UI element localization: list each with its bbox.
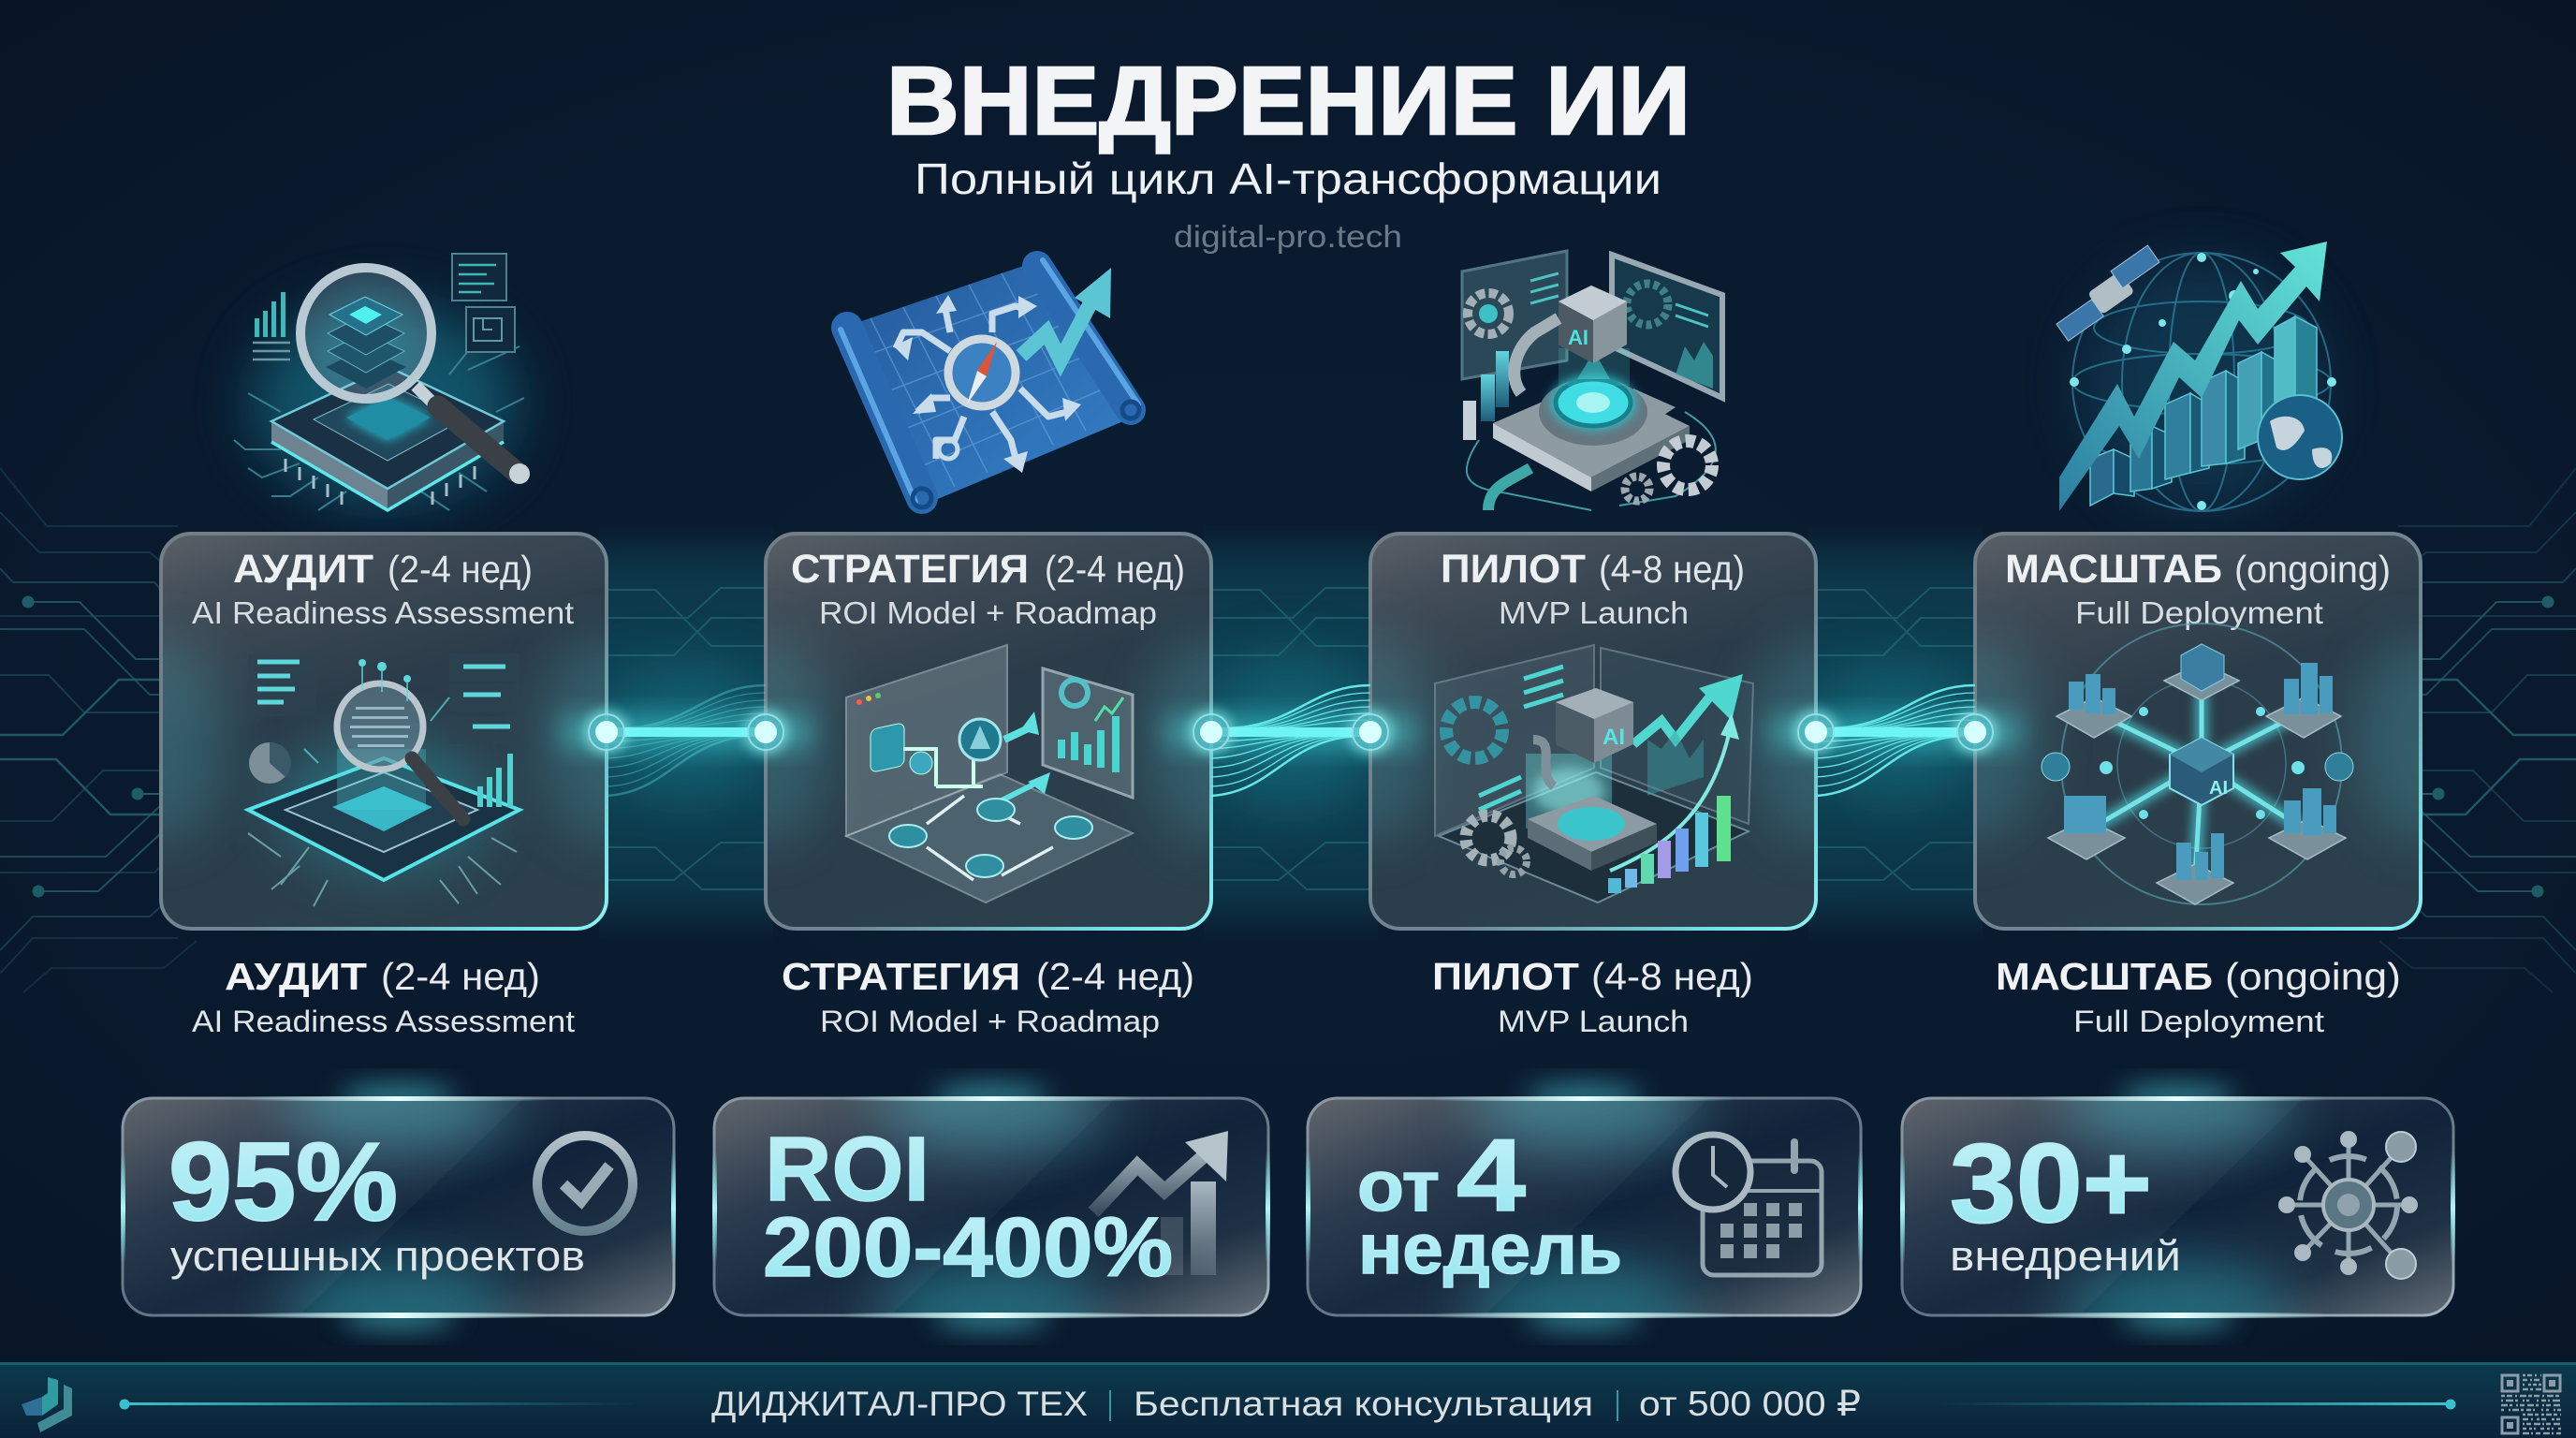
icon: audit magnifier over chip [234,254,530,510]
icon: check ring [537,1136,633,1231]
label: pilot: MVP Launch [1498,1005,1689,1038]
caption: успешных проектов [170,1232,585,1280]
value: 200-400% [763,1201,1173,1295]
heading: (ongoing) [2234,548,2391,591]
subheading: ROI Model + Roadmap [819,595,1157,630]
label: audit: (2-4 нед) [381,955,540,998]
footer right line [1939,1399,2456,1410]
heading: СТРАТЕГИЯ [791,547,1029,592]
connector: audit to strategy [562,685,811,796]
stat card: 30+ [1900,1058,2455,1357]
illustration: isometric roadmap [846,645,1133,902]
label: scale [1996,955,2401,1038]
card glow [1910,637,2486,843]
label: strategy: (2-4 нед) [1036,955,1194,998]
caption: внедрений [1950,1232,2181,1280]
illustration: hub network: AI [2209,778,2228,799]
label: pilot: ПИЛОТ [1432,955,1579,998]
value [763,1118,1173,1295]
circuit traces gap 3 [1816,588,1975,889]
circuit traces left [0,468,197,992]
heading: (2-4 нед) [388,548,533,591]
subheading: Full Deployment [2075,595,2323,630]
heading: АУДИТ [233,547,373,592]
card glow [700,637,1277,843]
label: audit: АУДИТ [225,955,367,998]
footer left line [120,1399,639,1410]
icon: logo [22,1377,72,1432]
gap glows [599,524,1983,941]
label: scale: (ongoing) [2225,955,2401,998]
label: pilot [1432,955,1753,1038]
label: scale: МАСШТАБ [1996,955,2213,998]
heading: ПИЛОТ [1441,547,1586,592]
lens [302,270,430,397]
label: strategy: ROI Model + Roadmap [820,1005,1160,1038]
footer text: ДИДЖИТАЛ-ПРО ТЕХ [711,1385,1088,1423]
subtitle: Полный цикл AI-трансформации [915,154,1661,203]
stat card: 95% [121,1058,676,1357]
circuit traces gap 1 [607,588,766,889]
label: audit [192,955,575,1038]
mini charts [255,292,285,337]
subheading: MVP Launch [1499,595,1689,630]
icon: rising chart [1093,1131,1228,1275]
label: pilot: (4-8 нед) [1591,955,1753,998]
heading [1441,547,1745,592]
value [1357,1118,1622,1289]
heading: (2-4 нед) [1045,548,1185,591]
icon: strategy blueprint map [841,260,1139,507]
website: digital-pro.tech [1174,219,1402,254]
panel: strategy card [764,532,1213,931]
footer text: Бесплатная консультация [1134,1385,1593,1423]
illustration: hub network [2042,624,2353,904]
label: audit: AI Readiness Assessment [192,1005,575,1038]
value: ROI [765,1118,929,1220]
panel: pilot card [1368,532,1818,931]
card glow [95,637,672,843]
heading: (4-8 нед) [1599,548,1745,591]
stat card: от 4 недель [1306,1058,1863,1357]
connector: strategy to pilot [1166,685,1415,796]
label: scale: Full Deployment [2073,1005,2324,1038]
circuit traces right [2379,468,2576,992]
value: от [1357,1147,1440,1226]
footer text: от 500 000 ₽ [1639,1385,1861,1423]
panel: audit card [159,532,608,931]
stat card: ROI [712,1058,1270,1357]
heading: МАСШТАБ [2005,547,2222,592]
circuit traces gap 2 [1211,588,1370,889]
title: ВНЕДРЕНИЕ ИИ [886,47,1690,154]
icon: clock and calendar [1676,1135,1822,1275]
icon: pilot AI machine: AI [1568,326,1588,349]
heading [791,547,1185,592]
icon: network hub [2278,1131,2418,1279]
label: strategy: СТРАТЕГИЯ [782,955,1020,998]
heading [2005,547,2391,592]
subheading: AI Readiness Assessment [192,595,574,630]
heading [233,547,533,592]
connector: pilot to scale [1771,685,2020,796]
icon: scale global growth [2050,242,2342,511]
value: 4 [1456,1118,1526,1233]
icon: pilot AI machine [1462,251,1722,510]
value: 95% [168,1120,398,1244]
illustration: pilot lab: AI [1603,725,1625,750]
card glow [1305,637,1881,843]
illustration: pilot lab [1435,645,1753,902]
value: 30+ [1950,1121,2152,1246]
illustration: magnifier over chip [248,653,520,906]
label: strategy [782,955,1194,1038]
footer bar [0,1362,2576,1438]
icon: QR code [2501,1375,2561,1433]
footer text [711,1385,1861,1423]
panel: scale card [1973,532,2422,931]
value: недель [1358,1210,1622,1289]
